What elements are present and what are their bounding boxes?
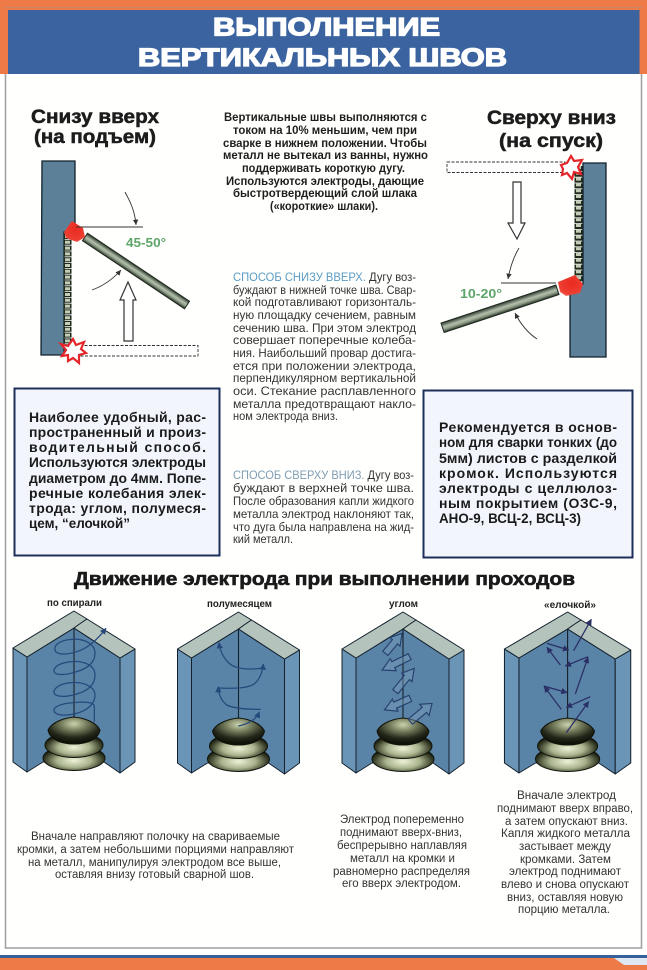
text: bottom-up method: буждают в нижней точке шва. Свар-: [233, 283, 416, 297]
text: top-down method: буждают в верхней точке шва.: [233, 481, 414, 495]
panel: top-down note: Рекомендуется в основ-: [439, 419, 617, 435]
caption: spiral and crescent: оставляя внизу готовый сварной шов.: [55, 869, 254, 881]
panel: top-down note: ным покрытием (ОЗС-9,: [439, 495, 617, 511]
intro text: сварке в нижнем положении. Чтобы: [223, 138, 427, 150]
intro text: быстротвердеющий слой шлака: [233, 188, 418, 200]
caption: herringbone: вниз, оставляя новую: [507, 892, 623, 904]
spiral path: [54, 628, 106, 722]
heading: bottom-up: Снизу вверх: [31, 107, 159, 128]
intro text: поддерживать короткую дугу.: [242, 163, 405, 175]
caption: spiral and crescent: на металл, манипулируя электродом все выше,: [28, 857, 281, 869]
plate: [570, 163, 606, 357]
panel: bottom-up note: Используются электроды: [29, 454, 206, 470]
panel: top-down note: АНО-9, ВСЦ-2, ВСЦ-3): [439, 510, 581, 526]
section heading: Движение электрода при выполнении проходов: [74, 569, 575, 589]
intro text: («короткие» шлаки).: [270, 201, 378, 213]
footer band: [0, 955, 647, 970]
electrode: [441, 285, 559, 333]
plate: [41, 161, 75, 355]
caption: herringbone: а затем опускают вниз.: [505, 816, 628, 828]
electrode: [83, 233, 189, 309]
text: bottom-up method: ния. Наибольший провар достига-: [233, 346, 416, 360]
text: bottom-up method: перпендикулярном вертикальной: [233, 371, 416, 385]
caption: angle: Электрод попеременно: [340, 814, 464, 826]
caption: angle: [333, 814, 470, 890]
heading: top-down: [487, 108, 616, 152]
title: [138, 14, 507, 72]
herringbone arrows: [544, 619, 591, 733]
caption: herringbone: поднимают вверх вправо,: [497, 803, 633, 815]
caption: herringbone: [497, 790, 633, 916]
intro text: металл не вытекал из ванны, нужно: [223, 150, 428, 162]
dashed start electrode: [447, 162, 565, 172]
spark star: [561, 156, 582, 179]
seam: [574, 166, 582, 282]
up arrow: [120, 282, 136, 341]
panel: top-down note: электроды с целлюлоз-: [439, 480, 617, 496]
down arrow: [508, 182, 525, 239]
angle label: 45-50°: [126, 235, 166, 250]
panel: bottom-up note: речные колебания элек-: [29, 485, 206, 501]
diagram: angle: [342, 599, 464, 774]
intro text: Вертикальные швы выполняются с: [224, 112, 428, 124]
reference line: [76, 226, 143, 228]
heading: bottom-up: [31, 107, 159, 148]
heading: bottom-up: (на подъем): [34, 127, 156, 148]
caption: herringbone: электрод поднимают: [509, 866, 622, 878]
text: top-down method: [233, 468, 414, 546]
caption: herringbone: порцию металла.: [518, 904, 610, 916]
angle label: 10-20°: [460, 286, 502, 301]
text: bottom-up method: ном электрода вниз.: [233, 409, 338, 423]
reference line: [501, 282, 556, 284]
panel: top-down note: [424, 390, 632, 558]
intro text: током на 10% меньшим, чем при: [233, 125, 417, 137]
label: spiral: по спирали: [47, 598, 102, 609]
caption: spiral and crescent: Вначале направляют полочку на свариваемые: [31, 831, 280, 843]
spark star: [61, 339, 86, 363]
heading: top-down: Сверху вниз: [487, 108, 616, 129]
text: top-down method: кий металл.: [233, 532, 293, 546]
text: top-down method: СПОСОБ СВЕРХУ ВНИЗ. Дугу воз-: [233, 468, 414, 482]
text: bottom-up method: ную площадку сечением, равным: [233, 308, 416, 322]
panel: bottom-up note: [14, 388, 220, 556]
angle arrows: [92, 192, 136, 290]
text: bottom-up method: совершает поперечные колеба-: [233, 333, 416, 347]
caption: angle: равномерно распределяя: [333, 866, 470, 878]
text: top-down method: что дуга была направлена на жид-: [233, 520, 414, 534]
panel: bottom-up note: Наиболее удобный, рас-: [29, 409, 206, 425]
dashed start electrode: [80, 346, 198, 356]
caption: angle: поднимают вверх-вниз,: [340, 827, 462, 839]
arc glow: [64, 221, 85, 242]
text: bottom-up method: [233, 270, 416, 423]
caption: herringbone: Вначале электрод: [517, 790, 616, 802]
caption: angle: металл на кромки и: [350, 853, 455, 865]
text: top-down method: После образования капли жидкого: [233, 494, 414, 508]
diagram: spiral: [13, 598, 135, 773]
label: crescent: полумесяцем: [207, 599, 272, 610]
text: bottom-up method: ется при положении электрода,: [233, 359, 416, 373]
intro text: Используются электроды, дающие: [226, 176, 424, 188]
panel: bottom-up note: диаметром до 4мм. Попе-: [29, 470, 206, 486]
title: ВЫПОЛНЕНИЕ: [213, 14, 440, 42]
caption: herringbone: застывает между: [519, 841, 611, 853]
text: bottom-up method: сечению шва. При этом электрод: [233, 321, 416, 335]
caption: herringbone: Капля жидкого металла: [501, 828, 631, 840]
arc glow: [558, 275, 583, 296]
diagram: welding bottom-up: [41, 161, 198, 363]
panel: top-down note: ном для сварки тонких (до: [439, 434, 617, 450]
label: angle: углом: [389, 599, 418, 610]
panel: bottom-up note: пространенный и произ-: [29, 424, 206, 440]
text: bottom-up method: металла предотвращают накло-: [233, 397, 416, 411]
heading: top-down: (на спуск): [499, 131, 603, 152]
angle arrows: [508, 248, 537, 339]
text: top-down method: металла электрод наклоняют так,: [233, 507, 414, 521]
title: ВЕРТИКАЛЬНЫХ ШВОВ: [138, 44, 507, 72]
seam: [64, 234, 72, 350]
caption: angle: его вверх электродом.: [342, 878, 461, 890]
panel: bottom-up note: трода: углом, полумеся-: [29, 500, 206, 516]
panel: bottom-up note: водительный способ.: [29, 439, 206, 455]
text: bottom-up method: СПОСОБ СНИЗУ ВВЕРХ. Дугу воз-: [233, 270, 416, 284]
caption: spiral and crescent: [17, 831, 295, 881]
diagram: herringbone: [504, 600, 631, 774]
header band: [0, 0, 647, 74]
caption: angle: беспрерывно наплавляя: [337, 840, 467, 852]
caption: spiral and crescent: кромки, а затем небольшими порциями направляют: [17, 844, 295, 856]
intro text: [223, 112, 428, 213]
crescent path: [218, 643, 263, 726]
caption: herringbone: кромками. Затем: [520, 854, 611, 866]
panel: bottom-up note: цем, “елочкой”: [29, 515, 130, 531]
panel: top-down note: 5мм) листов с разделкой: [439, 450, 617, 466]
text: bottom-up method: кой подготавливают горизонталь-: [233, 295, 416, 309]
diagram: welding top-down: [441, 156, 606, 357]
block arrows: [379, 629, 437, 727]
caption: herringbone: влево и снова опускают: [501, 879, 630, 891]
panel: top-down note: кромок. Используются: [439, 465, 617, 481]
text: bottom-up method: оси. Стекание расплавленного: [233, 384, 416, 398]
label: herringbone: «елочкой»: [544, 600, 596, 611]
diagram: crescent: [178, 599, 300, 774]
